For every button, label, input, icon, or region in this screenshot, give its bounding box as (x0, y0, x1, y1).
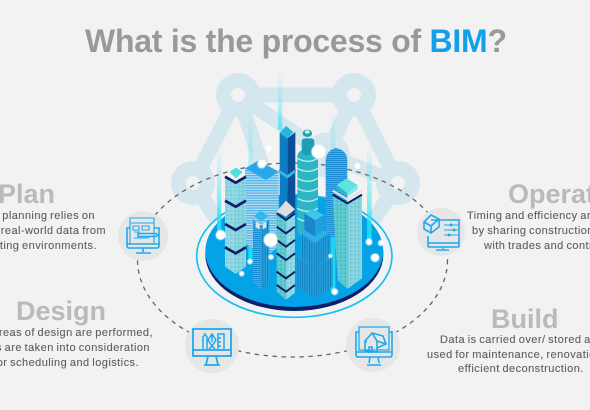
panel: plan (0, 179, 106, 252)
tower: dark spire (279, 126, 296, 217)
panel: operate (467, 179, 590, 252)
panel: design: Design (16, 296, 106, 326)
tower: right big (333, 178, 362, 289)
tower: small blue (253, 211, 269, 290)
icon: operate (417, 208, 465, 256)
tower: front banded (277, 201, 295, 300)
title: What is the process of BIM? (85, 23, 507, 59)
icon: design (185, 319, 239, 373)
light beams (217, 70, 372, 290)
isometric city on platform (197, 70, 392, 317)
background network logo (178, 80, 412, 255)
tower: spiral (297, 130, 318, 237)
icon: build (346, 318, 400, 372)
panel: build: Build (491, 304, 558, 334)
tower: rounded blue (326, 148, 347, 237)
panel: design (0, 296, 153, 369)
panel: plan: real-world data from (1, 225, 106, 237)
tower: stepped (297, 209, 333, 298)
tower: left banded (225, 168, 246, 274)
white puffs (216, 145, 384, 295)
panel: build (427, 304, 590, 375)
dashed cycle ring (138, 163, 448, 357)
icon: plan (118, 211, 168, 261)
panel: build: efficient deconstruction. (458, 363, 584, 375)
platform (197, 195, 392, 317)
tower: blue slab (245, 161, 279, 257)
